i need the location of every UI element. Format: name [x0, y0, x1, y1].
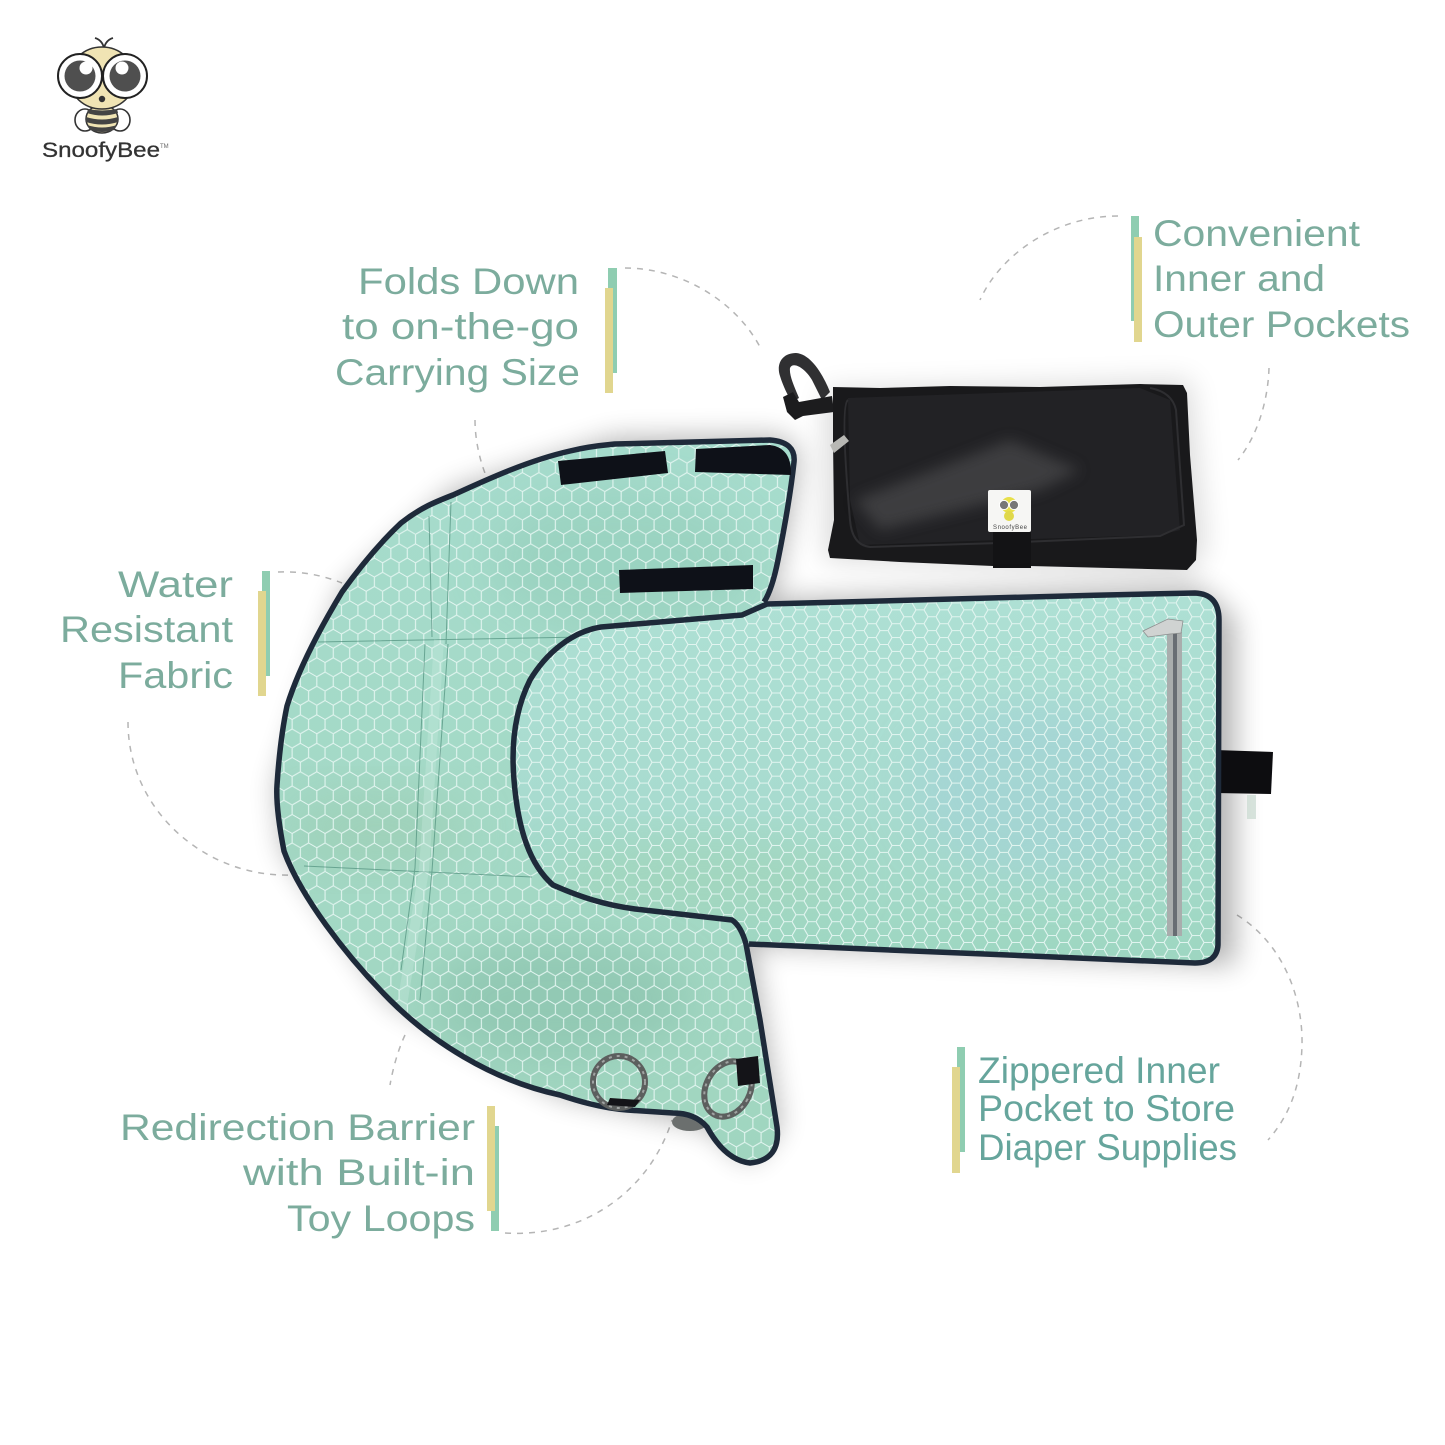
changing mat — [270, 430, 1273, 1170]
curved barrier panel — [270, 430, 810, 1170]
text — [120, 1107, 475, 1239]
mat binding edge — [277, 440, 1219, 1163]
velcro strip 2 — [695, 445, 791, 475]
callout: zippered inner pocket — [952, 1047, 1237, 1173]
text: Convenient — [1153, 213, 1361, 254]
velcro strip 1 — [558, 451, 668, 485]
text: Outer Pockets — [1153, 304, 1410, 345]
mat shadow — [277, 436, 1235, 1163]
text: Diaper Supplies — [978, 1127, 1237, 1168]
text: Zippered Inner — [978, 1050, 1220, 1091]
logo wordmark: SnoofyBee — [42, 139, 160, 162]
zipper pocket — [1143, 619, 1183, 936]
callout: redirection barrier — [120, 1106, 499, 1239]
text: Toy Loops — [287, 1198, 475, 1239]
callout: convenient pockets — [1131, 213, 1410, 345]
pouch shadow — [825, 380, 1205, 575]
pouch flap highlight — [848, 388, 1180, 545]
trademark: TM — [160, 144, 169, 150]
text: Water — [118, 564, 233, 605]
accent bars — [1131, 216, 1142, 342]
pouch zipper pull — [830, 435, 849, 453]
text — [1153, 213, 1410, 345]
pouch flap seam — [844, 388, 1184, 547]
text: Folds Down — [358, 261, 579, 302]
toy loop left — [593, 1056, 645, 1108]
text: to on-the-go — [342, 306, 579, 347]
pouch brand band — [993, 532, 1031, 568]
velcro strip 3 — [619, 565, 753, 593]
pouch body — [828, 384, 1197, 570]
text: Carrying Size — [335, 352, 580, 393]
infographic canvas — [42, 37, 1409, 1238]
text: Pocket to Store — [978, 1088, 1235, 1129]
accent bars — [952, 1047, 965, 1173]
logo: SnoofyBee — [42, 38, 169, 162]
text — [335, 261, 580, 393]
pouch buckle — [783, 392, 834, 420]
pouch sheen — [855, 440, 1080, 530]
text: Fabric — [118, 655, 233, 696]
callout: water resistant — [60, 564, 270, 696]
folded pouch — [779, 353, 1205, 575]
small tag — [1247, 795, 1256, 819]
text: Redirection Barrier — [120, 1107, 475, 1148]
pouch brand tag — [988, 490, 1031, 532]
text — [978, 1050, 1237, 1168]
accent bars — [487, 1106, 499, 1231]
pouch strap loop — [779, 353, 830, 402]
text: Resistant — [60, 609, 234, 650]
metal ring under tail — [672, 1113, 708, 1131]
side loop strap — [1215, 750, 1273, 794]
accent bars — [258, 571, 270, 696]
text: with Built-in — [242, 1152, 475, 1193]
toy loop right — [695, 1053, 761, 1125]
pouch brand tag: SnoofyBee — [993, 525, 1028, 531]
text: Inner and — [1153, 258, 1325, 299]
callout: folds down — [335, 261, 617, 393]
long body panel — [510, 590, 1230, 970]
dashed connector arcs — [128, 216, 1302, 1233]
accent bars — [605, 268, 617, 393]
icon: bee — [58, 38, 147, 133]
text — [60, 564, 234, 696]
